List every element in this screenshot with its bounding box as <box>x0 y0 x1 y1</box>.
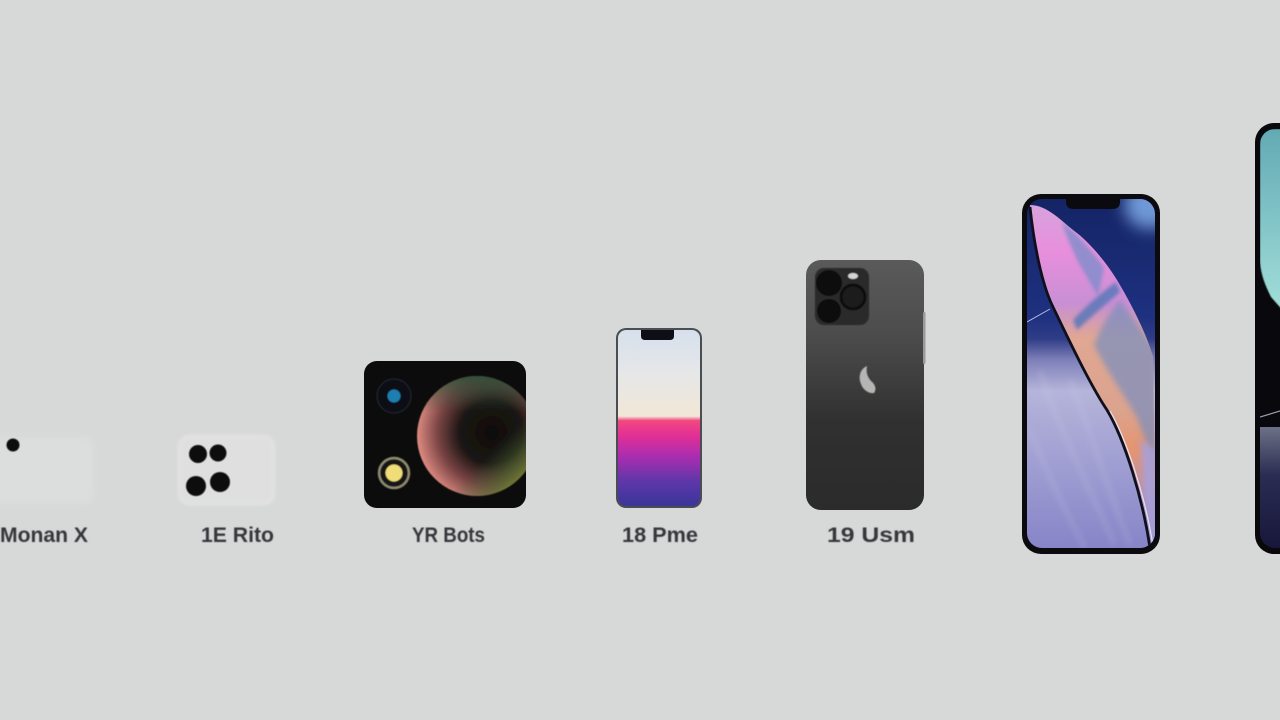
bottom lens <box>379 458 409 488</box>
streak <box>1260 411 1280 417</box>
label: device 1: Monan X <box>0 524 88 547</box>
lens top left <box>189 445 207 463</box>
lens top right <box>210 444 226 462</box>
sphere <box>417 376 537 496</box>
device 2: white camera module <box>179 436 274 504</box>
screen <box>1027 199 1155 548</box>
logo <box>860 366 875 393</box>
lens <box>6 438 20 452</box>
device 3: black square with sphere <box>364 361 537 508</box>
cloud band top <box>1062 222 1104 296</box>
lower lavender <box>1140 440 1157 548</box>
sky glow top right <box>1114 199 1155 239</box>
side buttons <box>923 312 926 364</box>
device 5: dark phone back <box>806 260 926 510</box>
planet <box>1027 199 1157 548</box>
device 4: small phone with gradient screen <box>616 328 702 508</box>
label: device 3: YR Bots <box>412 524 485 547</box>
dark limb <box>1030 207 1150 548</box>
screen <box>618 330 700 506</box>
teal wallpaper <box>1260 129 1280 308</box>
device 1: white back with one lens <box>0 436 94 504</box>
light arc <box>1110 411 1153 546</box>
cloud band middle <box>1073 282 1120 330</box>
infographic: phone line-up <box>0 123 1280 554</box>
label: device 4: 18 Pme <box>622 524 698 547</box>
label: device 2: 1E Rito <box>201 524 274 547</box>
navy wallpaper <box>1260 427 1280 548</box>
device 6: large phone with planet wallpaper <box>1022 194 1160 554</box>
notch <box>1066 198 1120 209</box>
top lens <box>377 379 411 413</box>
lavender streaks <box>1030 370 1130 548</box>
label: device 5: 19 Usm <box>827 524 915 547</box>
camera module <box>815 268 869 325</box>
notch <box>641 330 674 340</box>
cloud swirl <box>1094 300 1156 470</box>
device 7: cropped phone at right edge <box>1255 123 1280 554</box>
streak <box>1027 309 1050 322</box>
lens bottom right <box>210 472 230 492</box>
lens bottom left <box>186 476 206 496</box>
